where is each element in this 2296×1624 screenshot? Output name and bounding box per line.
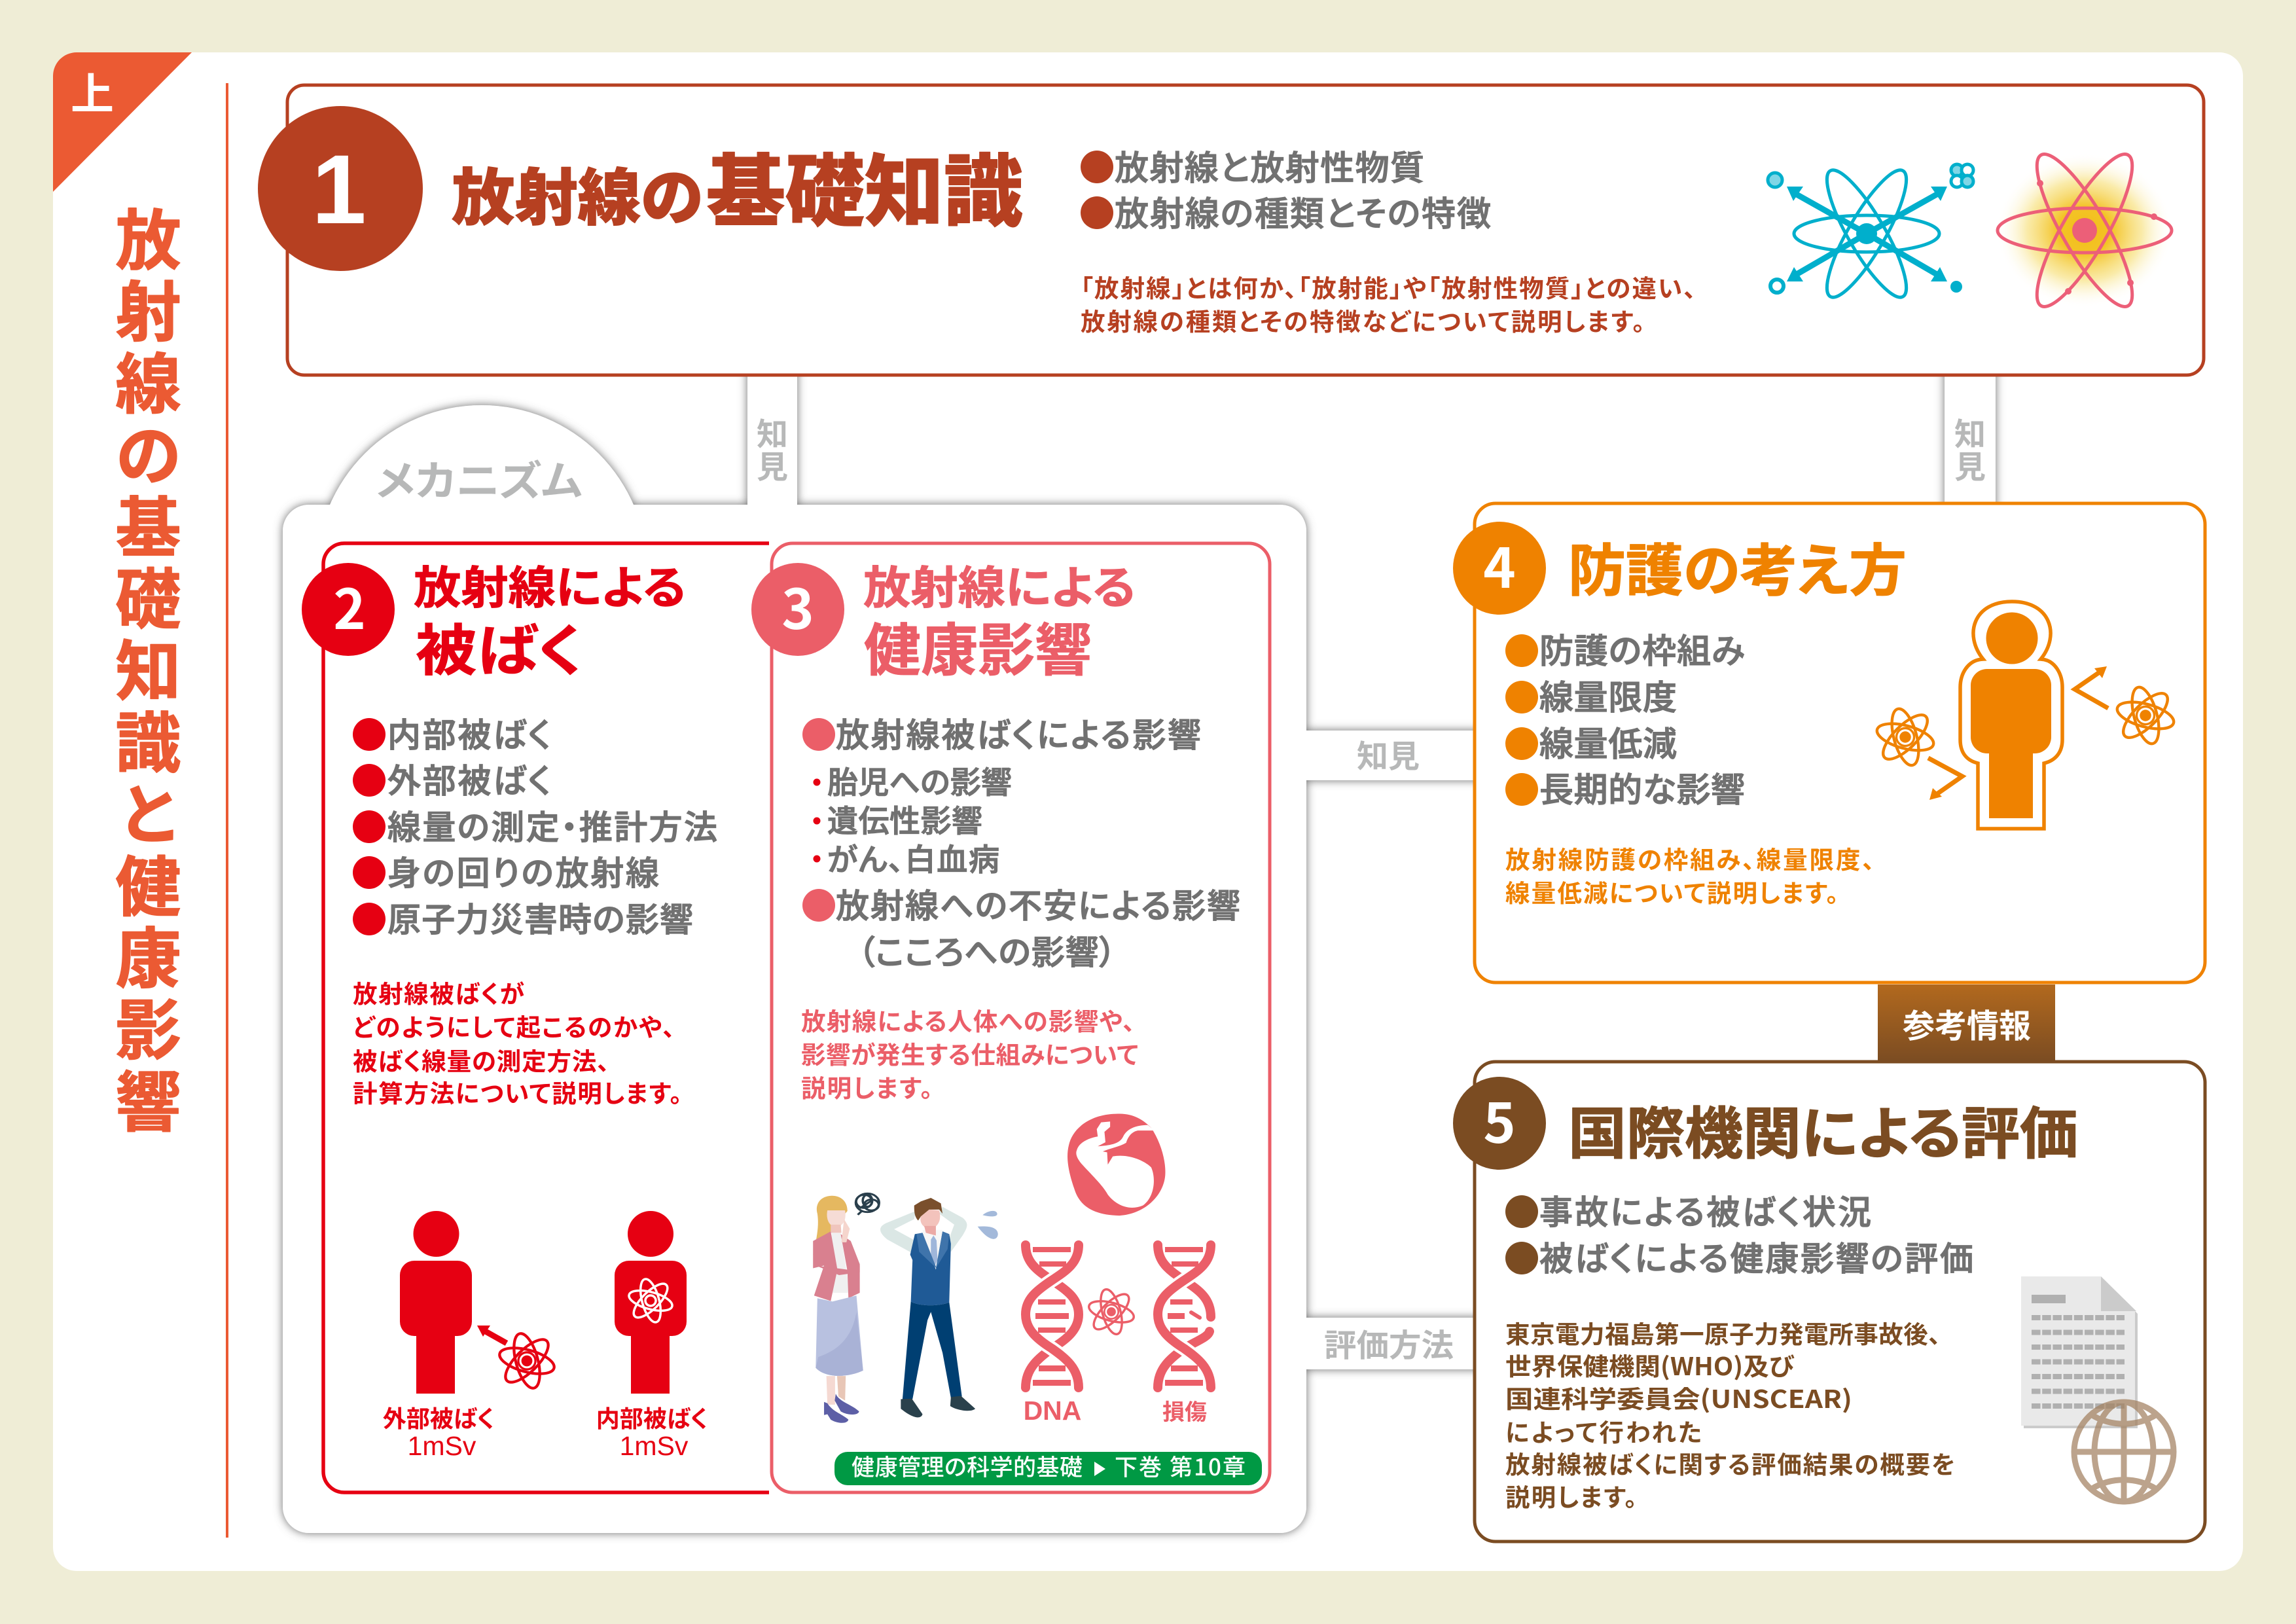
tag: 参考情報: 参考情報 (1903, 1000, 2031, 1047)
label: DNA: DNA (1024, 1396, 1081, 1426)
bullet list 1: 放射線の種類とその特徴 (1115, 187, 1491, 236)
description 2 (353, 974, 682, 1110)
description 1 (1081, 268, 1696, 338)
bullet list 3: （こころへの影響） (858, 926, 1116, 974)
heading 1: 放射線の (452, 149, 703, 238)
description 3 (801, 1001, 1138, 1104)
icon: radiation atom, pink with glow (1996, 144, 2173, 317)
bullet list 2: 身の回りの放射線 (387, 846, 659, 895)
bullet list 3: 胎児への影響 (827, 757, 1012, 803)
heading 2: 被ばく (416, 606, 583, 687)
mechanism panel with connector channels (283, 367, 1996, 1533)
number badge 4 (1453, 522, 1546, 615)
connector label: 知見 right: 知 (1954, 408, 1986, 454)
heading 1 (452, 128, 1023, 242)
heading 3: 健康影響 (864, 605, 1092, 687)
description 3: 影響が発生する仕組みについて (801, 1035, 1138, 1071)
illustration: worried man (880, 1198, 998, 1417)
icon: damaged DNA (1158, 1245, 1211, 1388)
bullet list 3: 放射線被ばくによる影響 (836, 708, 1201, 757)
panel 2: exposure (302, 543, 770, 1492)
number badge 4: 4 (1483, 525, 1516, 604)
panel 3: health effects (751, 543, 1270, 1492)
bullet list 1: 放射線と放射性物質 (1115, 141, 1424, 190)
description 5: 国連科学委員会(UNSCEAR) (1505, 1379, 1852, 1415)
heading 1: 基礎知識 (706, 128, 1023, 242)
icon: DNA (1026, 1245, 1079, 1388)
heading 2: 放射線による (414, 551, 686, 617)
icon: person internal exposure (615, 1211, 687, 1394)
caption: 外部被ばく: 1mSv (408, 1431, 476, 1461)
illustration: worried woman (813, 1193, 879, 1423)
icon: person external exposure (400, 1211, 557, 1394)
description 3: 放射線による人体への影響や、 (801, 1001, 1135, 1038)
bullet list 3: 放射線への不安による影響 (836, 879, 1240, 928)
heading 5: 国際機関による評価 (1568, 1088, 2078, 1170)
reference pill: chapter: 健康管理の科学的基礎 (852, 1449, 1083, 1483)
bullet list 4 (1505, 624, 1745, 812)
volume tab: 上 (53, 52, 192, 192)
description 2: 被ばく線量の測定方法、 (353, 1041, 609, 1077)
bullet list 3 (802, 708, 1240, 974)
description 2: 計算方法について説明します。 (353, 1074, 682, 1110)
number badge 2 (302, 563, 395, 656)
caption: 内部被ばく: 内部被ばく (596, 1400, 708, 1434)
number badge 2: 2 (333, 566, 366, 645)
heading 3: 放射線による (863, 551, 1136, 617)
label: 損傷: 損傷 (1162, 1394, 1207, 1426)
connector label: 知見 left: 見 (757, 441, 788, 487)
label: メカニズム: メカニズム (376, 448, 583, 508)
description 5: 東京電力福島第一原子力発電所事故後、 (1505, 1314, 1941, 1350)
bullet list 2: 内部被ばく (387, 708, 551, 757)
connector label: 知見 horizontal: 知見 (1357, 731, 1420, 776)
reference pill: chapter (834, 1449, 1262, 1485)
icon: protected person (1960, 602, 2062, 829)
connector label: 知見 right: 見 (1954, 441, 1986, 487)
bullet list 1 (1081, 141, 1491, 236)
description 3: 説明します。 (801, 1068, 933, 1104)
bullet list 2 (353, 708, 717, 941)
description 2: 放射線被ばくが (353, 974, 524, 1010)
description 1: 「放射線」とは何か、「放射能」や「放射性物質」との違い、 (1081, 268, 1696, 304)
vertical main title: 放射線の基礎知識と健康影響 (115, 188, 181, 1144)
icon: atom and deflected arrow left (1874, 706, 1962, 800)
bullet list 5: 被ばくによる健康影響の評価 (1539, 1232, 1973, 1280)
description 2: どのようにして起こるのかや、 (353, 1007, 675, 1043)
icon: globe (2074, 1402, 2174, 1502)
caption: 内部被ばく (596, 1400, 708, 1461)
tag: 参考情報 (1878, 984, 2055, 1062)
connector label: 知見 left: 知 (757, 408, 788, 454)
number badge 1 (258, 106, 423, 271)
description 4: 放射線防護の枠組み、線量限度、 (1505, 840, 1874, 876)
heading 3 (863, 551, 1136, 687)
reference pill: chapter: 下巻 第10章 (1115, 1449, 1246, 1483)
connector label: 知見 right (1954, 408, 1986, 487)
panel 4: protection (1453, 503, 2205, 983)
panel 1: basics (258, 85, 2204, 375)
icon: fetus (1067, 1113, 1165, 1216)
heading 2 (414, 551, 686, 687)
icon: document (2021, 1276, 2138, 1428)
caption: 外部被ばく (383, 1400, 494, 1461)
number badge 5: 5 (1483, 1080, 1516, 1159)
bullet list 4: 防護の枠組み (1539, 624, 1745, 673)
caption: 内部被ばく: 1mSv (620, 1431, 689, 1461)
number badge 3 (751, 563, 844, 656)
description 5 (1505, 1314, 1955, 1513)
number badge 1: 1 (312, 134, 367, 244)
bullet list 4: 長期的な影響 (1539, 763, 1745, 812)
bullet list 3: 遺伝性影響 (827, 796, 982, 841)
caption: 外部被ばく: 外部被ばく (383, 1400, 494, 1434)
description 1: 放射線の種類とその特徴などについて説明します。 (1081, 302, 1645, 338)
volume tab: 上: 上 (71, 60, 114, 122)
description 5: 説明します。 (1505, 1477, 1637, 1513)
bullet list 2: 原子力災害時の影響 (387, 893, 693, 941)
heading 4: 防護の考え方 (1568, 525, 1907, 607)
bullet list 2: 外部被ばく (387, 754, 551, 803)
number badge 3: 3 (781, 566, 814, 645)
description 5: 世界保健機関(WHO)及び (1505, 1346, 1795, 1382)
description 5: によって行われた (1505, 1413, 1702, 1449)
number badge 5 (1453, 1077, 1546, 1170)
connector label: 評価方法: 評価方法 (1324, 1320, 1454, 1365)
panel 5: international evaluation (1453, 1062, 2205, 1542)
bullet list 5 (1505, 1185, 1973, 1280)
bullet list 4: 線量限度 (1539, 670, 1677, 719)
description 5: 放射線被ばくに関する評価結果の概要を (1505, 1445, 1955, 1481)
icon: atom and deflected arrow right (2075, 666, 2176, 746)
description 4: 線量低減について説明します。 (1505, 873, 1839, 909)
bullet list 3: がん、白血病 (827, 835, 999, 880)
bullet list 5: 事故による被ばく状況 (1539, 1185, 1871, 1234)
icon: radiation atom, teal (1768, 162, 1973, 306)
bullet list 2: 線量の測定・推計方法 (387, 801, 717, 849)
bullet list 4: 線量低減 (1539, 717, 1677, 766)
icon: atom hitting DNA (1086, 1287, 1136, 1337)
connector label: 知見 left (757, 408, 788, 487)
description 4 (1505, 840, 1874, 909)
